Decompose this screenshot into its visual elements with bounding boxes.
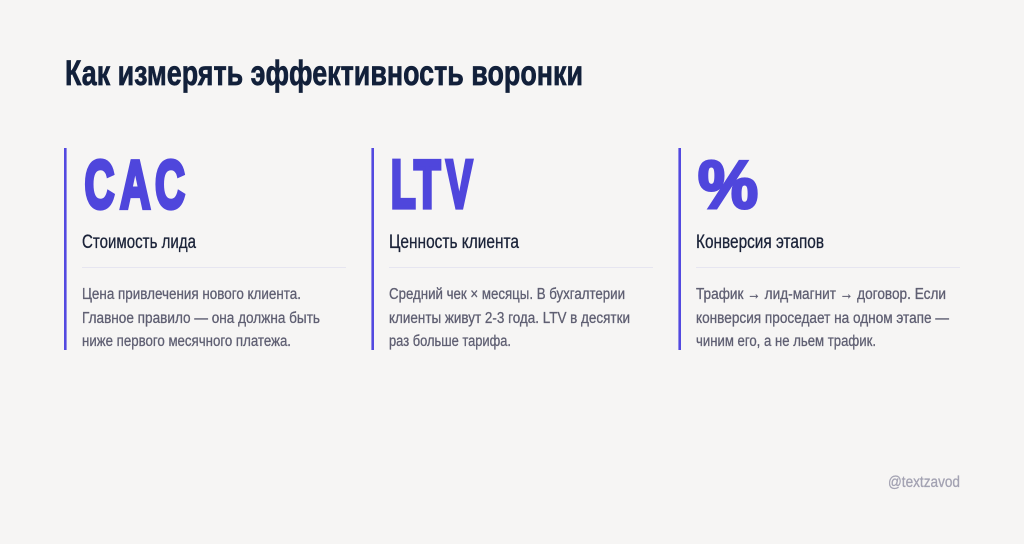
description: CAC: ниже первого месячного платежа.: [82, 333, 291, 350]
description: LTV: [389, 286, 630, 350]
metric: CAC: A: [120, 148, 150, 223]
metric: percent: %: [698, 148, 758, 223]
metric: CAC: C: [155, 148, 185, 223]
subheading: client value: Ценность клиента: [389, 232, 519, 253]
description: CAC: Цена привлечения нового клиента.: [82, 286, 301, 303]
description: conversion: чиним его, а не льем трафик.: [696, 333, 876, 350]
metric: LTV: T: [414, 148, 440, 222]
description: CAC: Главное правило — она должна быть: [82, 310, 320, 327]
description: conversion: [696, 286, 949, 350]
description: LTV: Средний чек × месяцы. В бухгалтерии: [389, 286, 625, 303]
description: LTV: клиенты живут 2-3 года. LTV в десятки: [389, 310, 630, 327]
metric: CAC: C: [84, 148, 114, 223]
description: CAC: [82, 286, 320, 350]
subheading: stage conversion: Конверсия этапов: [696, 232, 824, 253]
metric: LTV: [391, 148, 472, 222]
description: LTV: раз больше тарифа.: [389, 333, 511, 350]
metric: LTV: L: [391, 148, 416, 222]
subheading: lead cost: Стоимость лида: [82, 232, 196, 253]
accent bar: LTV: [371, 148, 374, 350]
description: conversion: Трафик → лид-магнит → договор. Если: [696, 286, 946, 303]
accent bar: conversion: [678, 148, 681, 350]
panel: conversion: [678, 148, 960, 350]
description: conversion: конверсия проседает на одном этапе —: [696, 310, 949, 327]
metric: CAC: [84, 148, 185, 223]
accent bar: CAC: [64, 148, 67, 350]
panel: CAC: [64, 148, 346, 350]
title: Как измерять эффективность воронки: [65, 53, 583, 93]
metric: LTV: V: [446, 148, 472, 222]
handle: @textzavod: [888, 474, 960, 491]
panel: LTV: [371, 148, 653, 350]
